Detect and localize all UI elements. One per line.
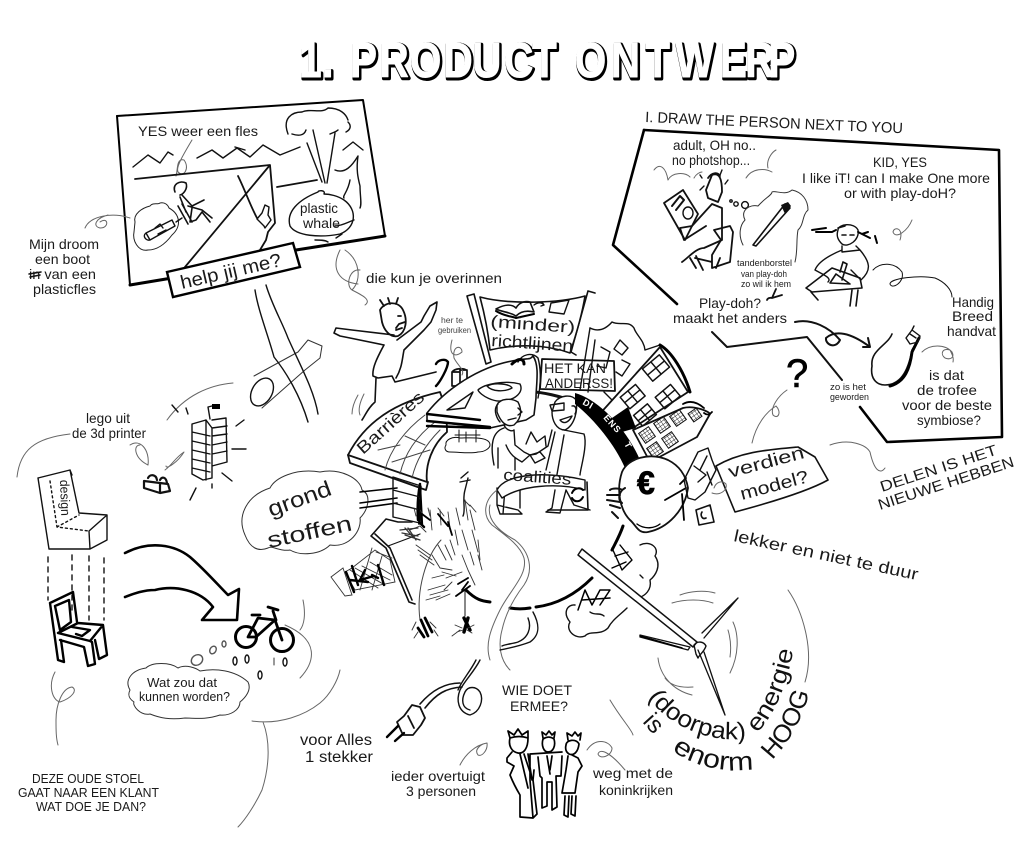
text: deze oude stoel: GAAT NAAR EEN KLANT bbox=[18, 785, 159, 800]
paper sheet building bbox=[590, 322, 660, 350]
swirl trophy bbox=[922, 346, 953, 362]
icon: river with bottle bbox=[246, 285, 322, 422]
icon: wooden chair bbox=[50, 592, 107, 666]
text: handig breed handvat: Breed bbox=[952, 308, 993, 324]
legs bbox=[497, 488, 590, 514]
river through globe bbox=[486, 490, 530, 670]
lower building bbox=[633, 407, 710, 462]
title: 1. PRODUCT ONTWERP bbox=[301, 35, 796, 89]
text: handig breed handvat bbox=[947, 294, 996, 339]
icon: boat bottle outline bbox=[135, 165, 317, 267]
swirls adult bbox=[654, 150, 776, 180]
cloud: grondstoffen: stoffen bbox=[265, 511, 354, 553]
text: yes weer een fles: YES weer een fles bbox=[138, 123, 258, 139]
swirl to boat text bbox=[176, 140, 192, 176]
icon: page bbox=[534, 300, 569, 314]
sign: minder richtlijnen bbox=[467, 291, 595, 364]
icon: landfill tent bbox=[331, 519, 420, 604]
text: adult oh no: adult, OH no.. bbox=[673, 137, 756, 153]
text: delen is het nieuwe hebben: DELEN IS HET bbox=[878, 442, 999, 496]
swirl: her te gebruiken bbox=[451, 340, 463, 375]
text: die kun je overinnen: die kun je overinnen bbox=[366, 270, 502, 286]
icon: three kings group bbox=[507, 729, 582, 818]
band: dienst: T bbox=[622, 440, 634, 451]
text: zo is het geworden: zo is het bbox=[830, 382, 866, 393]
icon: question mark: ? bbox=[786, 352, 808, 396]
house with windows bbox=[597, 347, 688, 428]
sign: het kan anders bbox=[540, 359, 615, 391]
icon: child at table bbox=[806, 225, 877, 306]
swirl weg met bbox=[587, 742, 625, 770]
text: voor alles 1 stekker: 1 stekker bbox=[305, 749, 373, 766]
panel: barrieres roof bbox=[348, 388, 447, 527]
text: ieder overtuigt: 3 personen bbox=[406, 783, 476, 799]
text: is enorm hoog: enorm bbox=[675, 742, 752, 771]
text: is enorm hoog bbox=[638, 690, 808, 771]
callout: wat zou dat kunnen worden bbox=[128, 641, 249, 719]
swirls lower left bbox=[51, 600, 340, 827]
text: doorpak energie bbox=[648, 650, 792, 744]
text: whale: whale bbox=[302, 215, 340, 231]
text: doorpak energie: energie bbox=[750, 650, 792, 730]
text: adult oh no bbox=[672, 137, 756, 168]
icon: open book bbox=[496, 302, 534, 316]
bottom river swoosh bbox=[500, 612, 538, 650]
icon: play-doh trophy bbox=[872, 326, 920, 386]
icon: person on chair bbox=[174, 182, 212, 224]
text: kid yes: I like iT! can I make One more bbox=[802, 170, 990, 186]
queen bbox=[562, 732, 582, 817]
text: adult oh no: no photshop... bbox=[672, 152, 750, 168]
swirl to dream cloud bbox=[85, 215, 130, 228]
banner: coalities: coalities bbox=[503, 467, 572, 489]
swirl kid bbox=[893, 220, 912, 240]
text: is dat de trofee: symbiose? bbox=[917, 412, 981, 428]
icon: toothbrush in cloud bbox=[740, 190, 808, 262]
text: play-doh: maakt het anders bbox=[673, 310, 787, 326]
icon: coalition handshake men bbox=[492, 396, 590, 514]
text: is enorm hoog: HOOG bbox=[760, 690, 808, 759]
sign: help jij me: help jij me? bbox=[178, 250, 283, 294]
text: ieder overtuigt bbox=[391, 768, 485, 799]
text: tandenborstel: zo wil ik hem bbox=[741, 279, 791, 290]
icon: pillar bbox=[393, 477, 421, 523]
icon: design chair bbox=[38, 470, 107, 620]
text: tandenborstel: tandenborstel bbox=[737, 258, 792, 269]
text: weg met de koninkrijken: weg met de bbox=[592, 765, 673, 781]
text: lego uit de 3d printer: de 3d printer bbox=[72, 425, 146, 441]
text: deze oude stoel: WAT DOE JE DAN? bbox=[36, 799, 146, 814]
text: her te gebruiken: gebruiken bbox=[438, 325, 471, 335]
icon: small cans bbox=[452, 369, 467, 386]
band: dienst: DI bbox=[581, 397, 596, 411]
text: handig breed handvat: Handig bbox=[952, 294, 994, 310]
text: voor alles 1 stekker bbox=[300, 732, 373, 766]
text: wie doet ermee: ERMEE? bbox=[510, 698, 568, 714]
icon: lego brick bbox=[144, 475, 170, 493]
swirl: overinnen bbox=[336, 250, 367, 305]
text: is dat de trofee bbox=[902, 367, 992, 428]
callout: wat zou dat kunnen worden: Wat zou dat bbox=[147, 676, 218, 690]
cloud: grondstoffen: grond bbox=[264, 476, 335, 522]
text: her te gebruiken bbox=[438, 315, 471, 335]
sign: het kan anders: ANDERSS! bbox=[545, 375, 613, 391]
text: wie doet ermee: WIE DOET bbox=[502, 682, 572, 698]
icon: insect bbox=[464, 590, 466, 616]
text: mijn droom: plasticfles bbox=[33, 281, 96, 297]
text: delen is het nieuwe hebben: NIEUWE HEBBEN bbox=[876, 454, 1016, 514]
icon: 3d printer with lego towers bbox=[17, 383, 246, 500]
icon: wheat bbox=[418, 618, 432, 637]
cloud: grondstoffen bbox=[242, 471, 397, 554]
text: tandenborstel bbox=[737, 258, 792, 290]
banknote bbox=[696, 505, 714, 525]
text: delen is het nieuwe hebben bbox=[876, 442, 1016, 514]
band: dienst bbox=[575, 393, 640, 468]
arrow: tooth to play-doh bbox=[767, 289, 782, 300]
panel: plastic whale boat bbox=[85, 100, 385, 297]
drips bbox=[273, 658, 275, 665]
coin stack bbox=[607, 488, 625, 518]
text: tandenborstel: van play-doh bbox=[741, 269, 787, 280]
swirl handig bbox=[873, 264, 952, 297]
icon: buildings bbox=[580, 322, 712, 462]
arrow: chair to bike bbox=[125, 545, 239, 620]
icon: bicycle bbox=[233, 607, 294, 679]
icon: ship on globe bbox=[427, 355, 540, 453]
text: is enorm hoog: is bbox=[638, 708, 669, 739]
sign: het kan anders: HET KAN bbox=[544, 360, 606, 376]
text: play-doh: Play-doh? bbox=[699, 295, 761, 311]
euro symbol: € bbox=[637, 465, 655, 501]
right man bbox=[552, 396, 577, 430]
title: 1. PRODUCT ONTWERP bbox=[299, 33, 795, 88]
text: design: design bbox=[57, 480, 73, 516]
graphic: globe arcs bbox=[418, 392, 623, 609]
icon: wind turbine bbox=[578, 549, 809, 735]
icon: adult drawing bbox=[664, 170, 748, 270]
heading: I. DRAW THE PERSON NEXT TO YOU bbox=[645, 109, 903, 137]
text: is dat de trofee: voor de beste bbox=[902, 397, 992, 413]
text: kid yes bbox=[802, 154, 990, 201]
icon: trees bbox=[566, 543, 658, 637]
swirl: verdien bbox=[712, 482, 726, 494]
icon: plastic bag whale bbox=[289, 191, 354, 242]
text: lego uit de 3d printer bbox=[72, 410, 146, 441]
text: kid yes: or with play-doH? bbox=[844, 185, 956, 201]
rope and notes bbox=[665, 478, 686, 520]
text: mijn droom bbox=[29, 236, 99, 297]
scribble: grass and plants bbox=[410, 472, 482, 638]
left man bbox=[497, 399, 521, 426]
icon: whale tail bbox=[335, 156, 361, 208]
text: wie doet ermee bbox=[502, 682, 572, 714]
sign: verdien model bbox=[716, 442, 828, 512]
swirl ieder bbox=[460, 743, 487, 765]
icon: small bottle bbox=[257, 205, 271, 228]
icon: money bag bbox=[607, 448, 716, 532]
text: plastic whale: plastic bbox=[300, 200, 338, 216]
swirls right bbox=[752, 390, 885, 471]
left king bbox=[507, 729, 562, 818]
banner: coalities bbox=[497, 467, 588, 510]
arrow: to trophy bbox=[795, 321, 870, 347]
icon: plug bbox=[387, 660, 482, 741]
text: zo is het geworden: geworden bbox=[830, 392, 869, 403]
icon: dream bottle bbox=[144, 218, 182, 240]
text: lego uit de 3d printer: lego uit bbox=[86, 410, 130, 426]
icon: dream cloud bbox=[134, 203, 178, 250]
text: handig breed handvat: handvat bbox=[947, 323, 996, 339]
text: mijn droom: in van een bbox=[29, 266, 96, 282]
text: deze oude stoel: DEZE OUDE STOEL bbox=[32, 771, 144, 786]
text: kid yes: KID, YES bbox=[873, 154, 927, 170]
text: is dat de trofee: de trofee bbox=[917, 382, 977, 398]
sign: verdien model: model? bbox=[738, 466, 811, 504]
panel: barrieres roof: Barrières bbox=[353, 388, 428, 458]
text: voor alles 1 stekker: voor Alles bbox=[300, 732, 372, 749]
icon: recycle box bbox=[548, 482, 588, 510]
text: play-doh bbox=[673, 295, 787, 326]
text: lekker en niet te duur: lekker en niet te duur bbox=[732, 526, 920, 584]
icon: waves bbox=[133, 142, 363, 167]
text: doorpak energie: (doorpak) bbox=[648, 691, 744, 744]
character: jumping man bbox=[334, 298, 448, 420]
panel: draw the person bbox=[613, 109, 1002, 442]
sign: help jij me bbox=[167, 243, 300, 297]
text: deze oude stoel bbox=[18, 771, 159, 814]
icon: whale spout bbox=[286, 108, 350, 183]
text: mijn droom: Mijn droom bbox=[29, 236, 99, 252]
text: zo is het geworden bbox=[830, 382, 869, 403]
text: weg met de koninkrijken: koninkrijken bbox=[599, 782, 673, 798]
callout: wat zou dat kunnen worden: kunnen worden? bbox=[139, 690, 230, 704]
sign: minder richtlijnen: richtlijnen bbox=[491, 331, 574, 356]
dashed projection lines bbox=[48, 555, 104, 620]
text: her te gebruiken: her te bbox=[441, 315, 463, 325]
text: is dat de trofee: is dat bbox=[929, 367, 964, 383]
sign: verdien model: verdien bbox=[726, 442, 806, 482]
text: ieder overtuigt: ieder overtuigt bbox=[391, 768, 485, 784]
text: weg met de koninkrijken bbox=[592, 765, 673, 798]
band: dienst: ENS bbox=[602, 413, 623, 435]
icon: little cloud bbox=[445, 430, 490, 453]
text: mijn droom: een boot bbox=[35, 251, 90, 267]
sign: minder richtlijnen: (minder) bbox=[490, 312, 576, 337]
center king bbox=[538, 731, 562, 810]
